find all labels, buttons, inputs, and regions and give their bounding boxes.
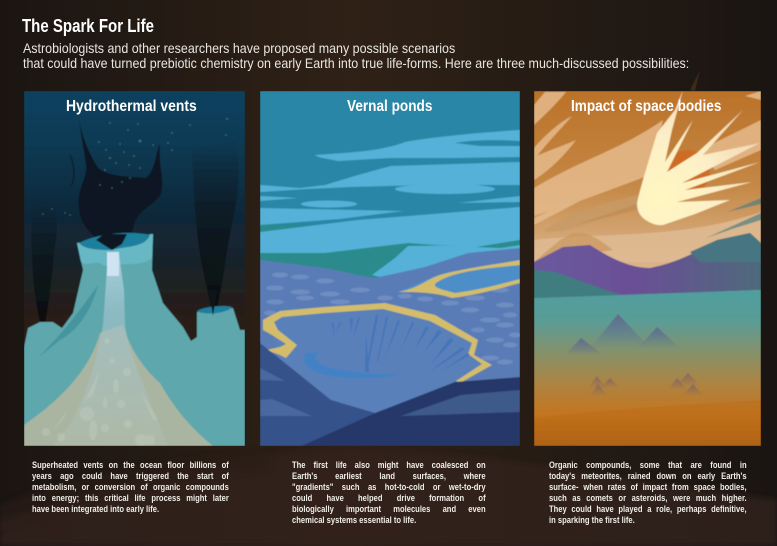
text: vernal ponds description bbox=[292, 460, 486, 526]
text: impact description: today's meteorites, rained down on early Earth's bbox=[549, 471, 747, 482]
pyramids bbox=[597, 314, 642, 342]
volcano body bbox=[24, 234, 245, 446]
vent opening bbox=[79, 233, 150, 250]
text: vernal ponds description: The first life also might have coalesced on bbox=[292, 460, 486, 471]
waterfall bbox=[64, 256, 163, 439]
panel: vernal ponds illustration bbox=[260, 91, 521, 446]
panel: hydrothermal vents illustration bbox=[24, 91, 245, 446]
sand fan bbox=[24, 325, 213, 446]
rocks in waterfall bbox=[42, 338, 158, 446]
clouds bbox=[260, 130, 520, 282]
sun bbox=[668, 150, 710, 190]
intro text: that could have turned prebiotic chemistry on early Earth into true life-forms. Here are three much-discussed possibilities: bbox=[23, 55, 689, 71]
text: impact description: surface- when rates of impact from space bodies, bbox=[549, 482, 747, 493]
text: hydrothermal vents description: metabolism, or conversion of organic compounds bbox=[32, 482, 229, 493]
text: vernal ponds description: Earth's earliest land surfaces, where bbox=[292, 471, 486, 482]
text: impact description bbox=[549, 460, 747, 526]
intro text: Astrobiologists and other researchers have proposed many possible scenarios bbox=[23, 40, 455, 56]
heading: vernal ponds: Vernal ponds bbox=[347, 98, 432, 115]
text: hydrothermal vents description: into energy; this critical life process might later bbox=[32, 493, 229, 504]
distant mountains bbox=[534, 233, 761, 298]
text: impact description: Organic compounds, some that are found in bbox=[549, 460, 747, 471]
text: vernal ponds description: biologically important molecules and even bbox=[292, 504, 486, 515]
foreground left ridge bbox=[260, 343, 375, 446]
text: impact description: such as comets or asteroids, were much higher. bbox=[549, 493, 747, 504]
left smoke plume bbox=[30, 224, 58, 322]
meteor with trailing spikes bbox=[637, 90, 760, 225]
heading: impact of space bodies: Impact of space bodies bbox=[571, 98, 721, 115]
foreground right ridge bbox=[301, 377, 520, 446]
text: vernal ponds description: chemical systems essential to life. bbox=[292, 515, 416, 526]
heading: hydrothermal vents: Hydrothermal vents bbox=[66, 98, 197, 115]
text: impact description: in sparking the first life. bbox=[549, 515, 635, 526]
crater bbox=[268, 304, 490, 420]
text: vernal ponds description: could have helped drive formation of bbox=[292, 493, 486, 504]
dotted hills bbox=[260, 248, 520, 389]
panel: impact of space bodies illustration bbox=[534, 90, 761, 446]
bubbles bbox=[42, 118, 228, 216]
intro text bbox=[23, 40, 689, 71]
text: hydrothermal vents description bbox=[32, 460, 229, 515]
text: hydrothermal vents description: have been integrated into early life. bbox=[32, 504, 159, 515]
streaks near meteor bbox=[706, 198, 761, 238]
text: hydrothermal vents description: years ago could have triggered the start of bbox=[32, 471, 229, 482]
title: The Spark For Life bbox=[22, 16, 154, 36]
sky streaks bbox=[534, 91, 761, 262]
crater rim bbox=[263, 303, 492, 383]
text: impact description: They could have played a role, perhaps definitive, bbox=[549, 504, 747, 515]
water bbox=[534, 290, 761, 446]
text: hydrothermal vents description: Superheated vents on the ocean floor billions of bbox=[32, 460, 229, 471]
text: vernal ponds description: "gradients" such as hot-to-cold or wet-to-dry bbox=[292, 482, 486, 493]
upper pond bbox=[400, 264, 520, 293]
crater grooves bbox=[332, 314, 470, 375]
central smoke plume bbox=[78, 122, 162, 236]
right smoke plume bbox=[193, 162, 238, 307]
crater pool bbox=[304, 352, 402, 378]
